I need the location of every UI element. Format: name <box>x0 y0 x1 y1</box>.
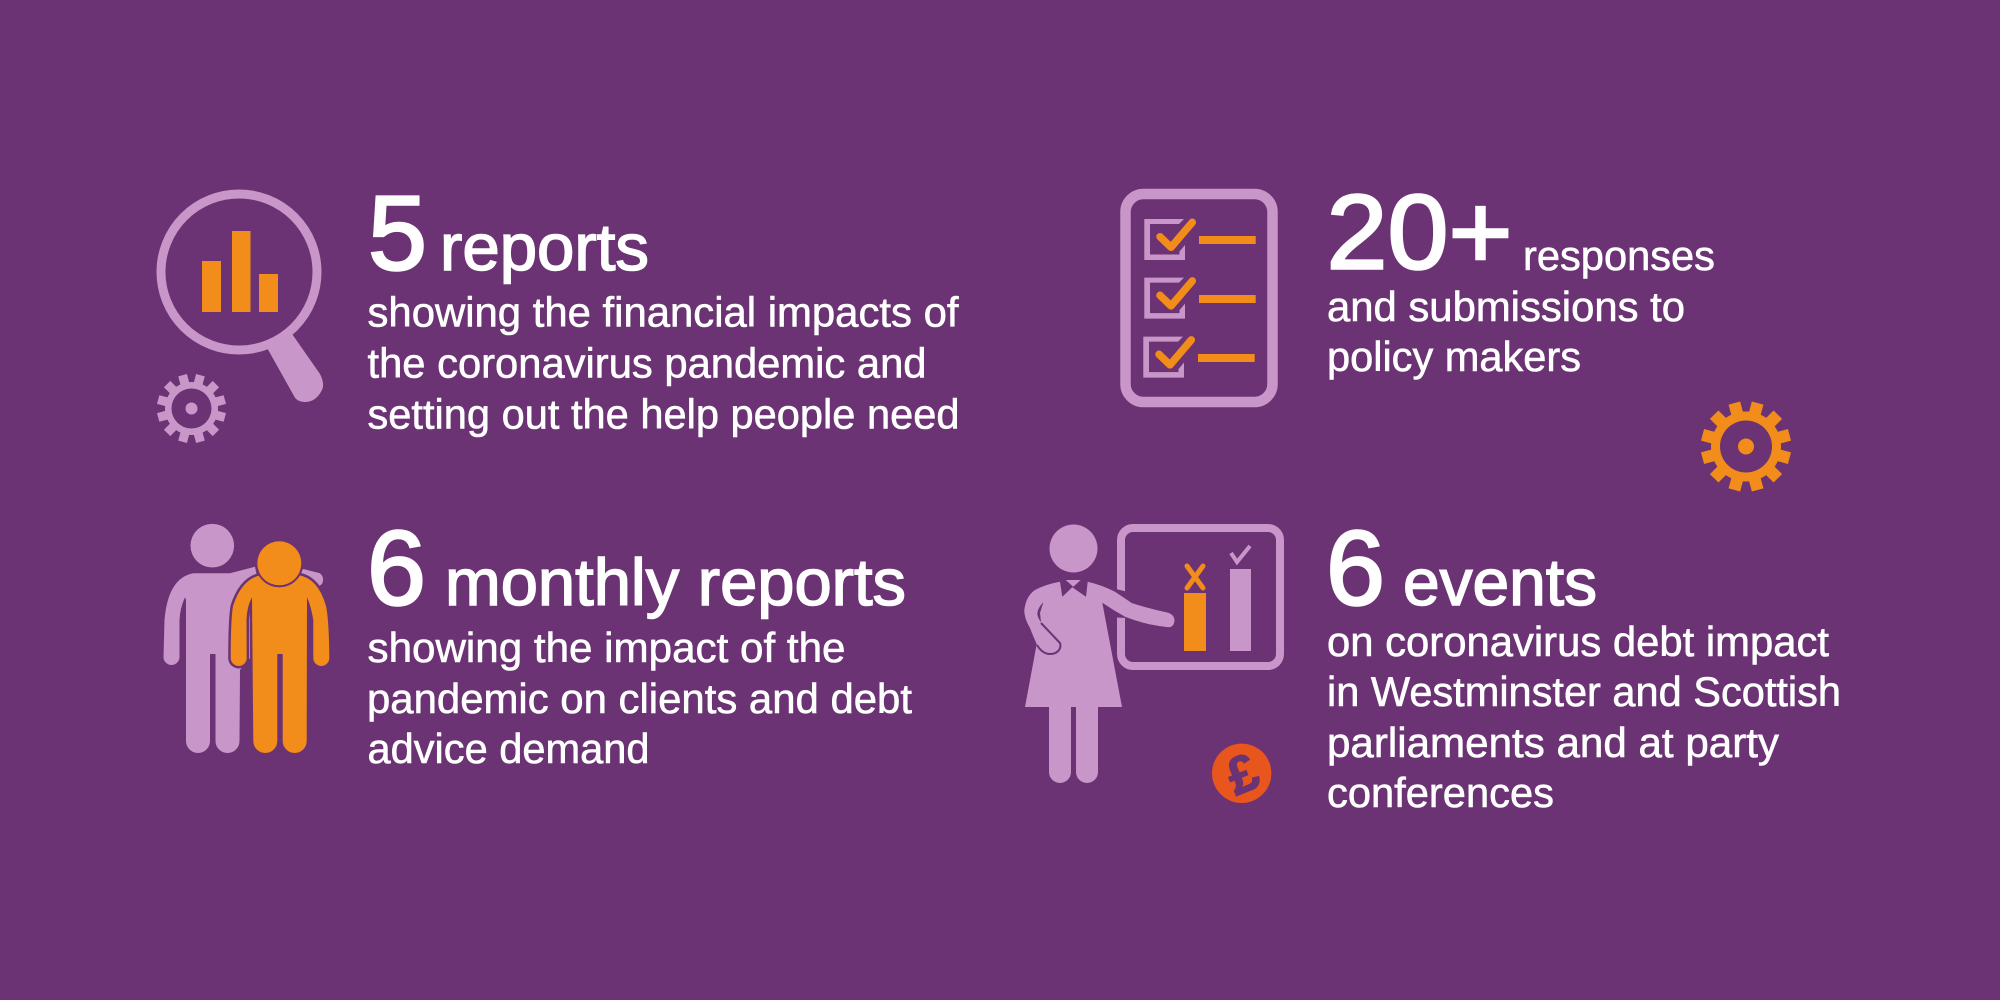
text block: 6 monthly reports description <box>367 624 912 772</box>
panel: 6 monthly reports <box>164 510 912 772</box>
text block: 20+ responses description: policy makers <box>1327 333 1581 380</box>
heading: 6 events: 6 <box>1326 510 1385 628</box>
heading: 20+ responses: 20+ <box>1326 174 1512 292</box>
icon: pound coin: £ <box>1218 743 1267 807</box>
heading: 5 reports <box>368 174 649 292</box>
text block: 6 events description: conferences <box>1327 769 1554 816</box>
heading: 5 reports: 5 <box>368 174 427 292</box>
panel: 5 reports <box>157 174 960 443</box>
text block: 5 reports description: showing the financial impacts of <box>368 288 959 336</box>
heading: 20+ responses <box>1326 174 1715 292</box>
heading: 6 monthly reports: monthly reports <box>445 546 906 619</box>
text block: 5 reports description <box>368 288 960 438</box>
heading: 20+ responses: responses <box>1523 232 1715 279</box>
heading: 6 monthly reports: 6 <box>367 510 426 628</box>
text block: 6 events description <box>1327 618 1841 816</box>
text block: 5 reports description: setting out the help people need <box>368 390 960 438</box>
text block: 6 events description: parliaments and at party <box>1327 719 1779 766</box>
text block: 6 events description: on coronavirus debt impact <box>1327 618 1829 665</box>
icon: orange gear <box>1701 401 1791 492</box>
icon: magnifying glass with bar chart <box>161 194 323 402</box>
icon: checklist <box>1126 194 1272 402</box>
text block: 6 monthly reports description: pandemic on clients and debt <box>367 675 912 722</box>
icon: lilac gear <box>157 374 226 443</box>
heading: 6 events: events <box>1403 546 1597 619</box>
text block: 6 monthly reports description: advice demand <box>368 725 650 772</box>
heading: 5 reports: reports <box>440 211 649 284</box>
text block: 5 reports description: the coronavirus pandemic and <box>368 340 926 386</box>
text block: 20+ responses description: and submissions to <box>1327 283 1685 330</box>
icon: presentation board with bars <box>1116 528 1280 666</box>
panel: 20+ responses <box>1126 174 1791 492</box>
icon: presenter figure <box>1024 524 1174 783</box>
heading: 6 monthly reports <box>367 510 906 628</box>
text block: 6 monthly reports description: showing the impact of the <box>368 624 846 671</box>
icon: two people <box>164 524 329 753</box>
panel: 6 events <box>1024 510 1841 816</box>
heading: 6 events <box>1326 510 1597 628</box>
text block: 20+ responses description <box>1327 283 1685 380</box>
text block: 6 events description: in Westminster and Scottish <box>1327 668 1841 715</box>
